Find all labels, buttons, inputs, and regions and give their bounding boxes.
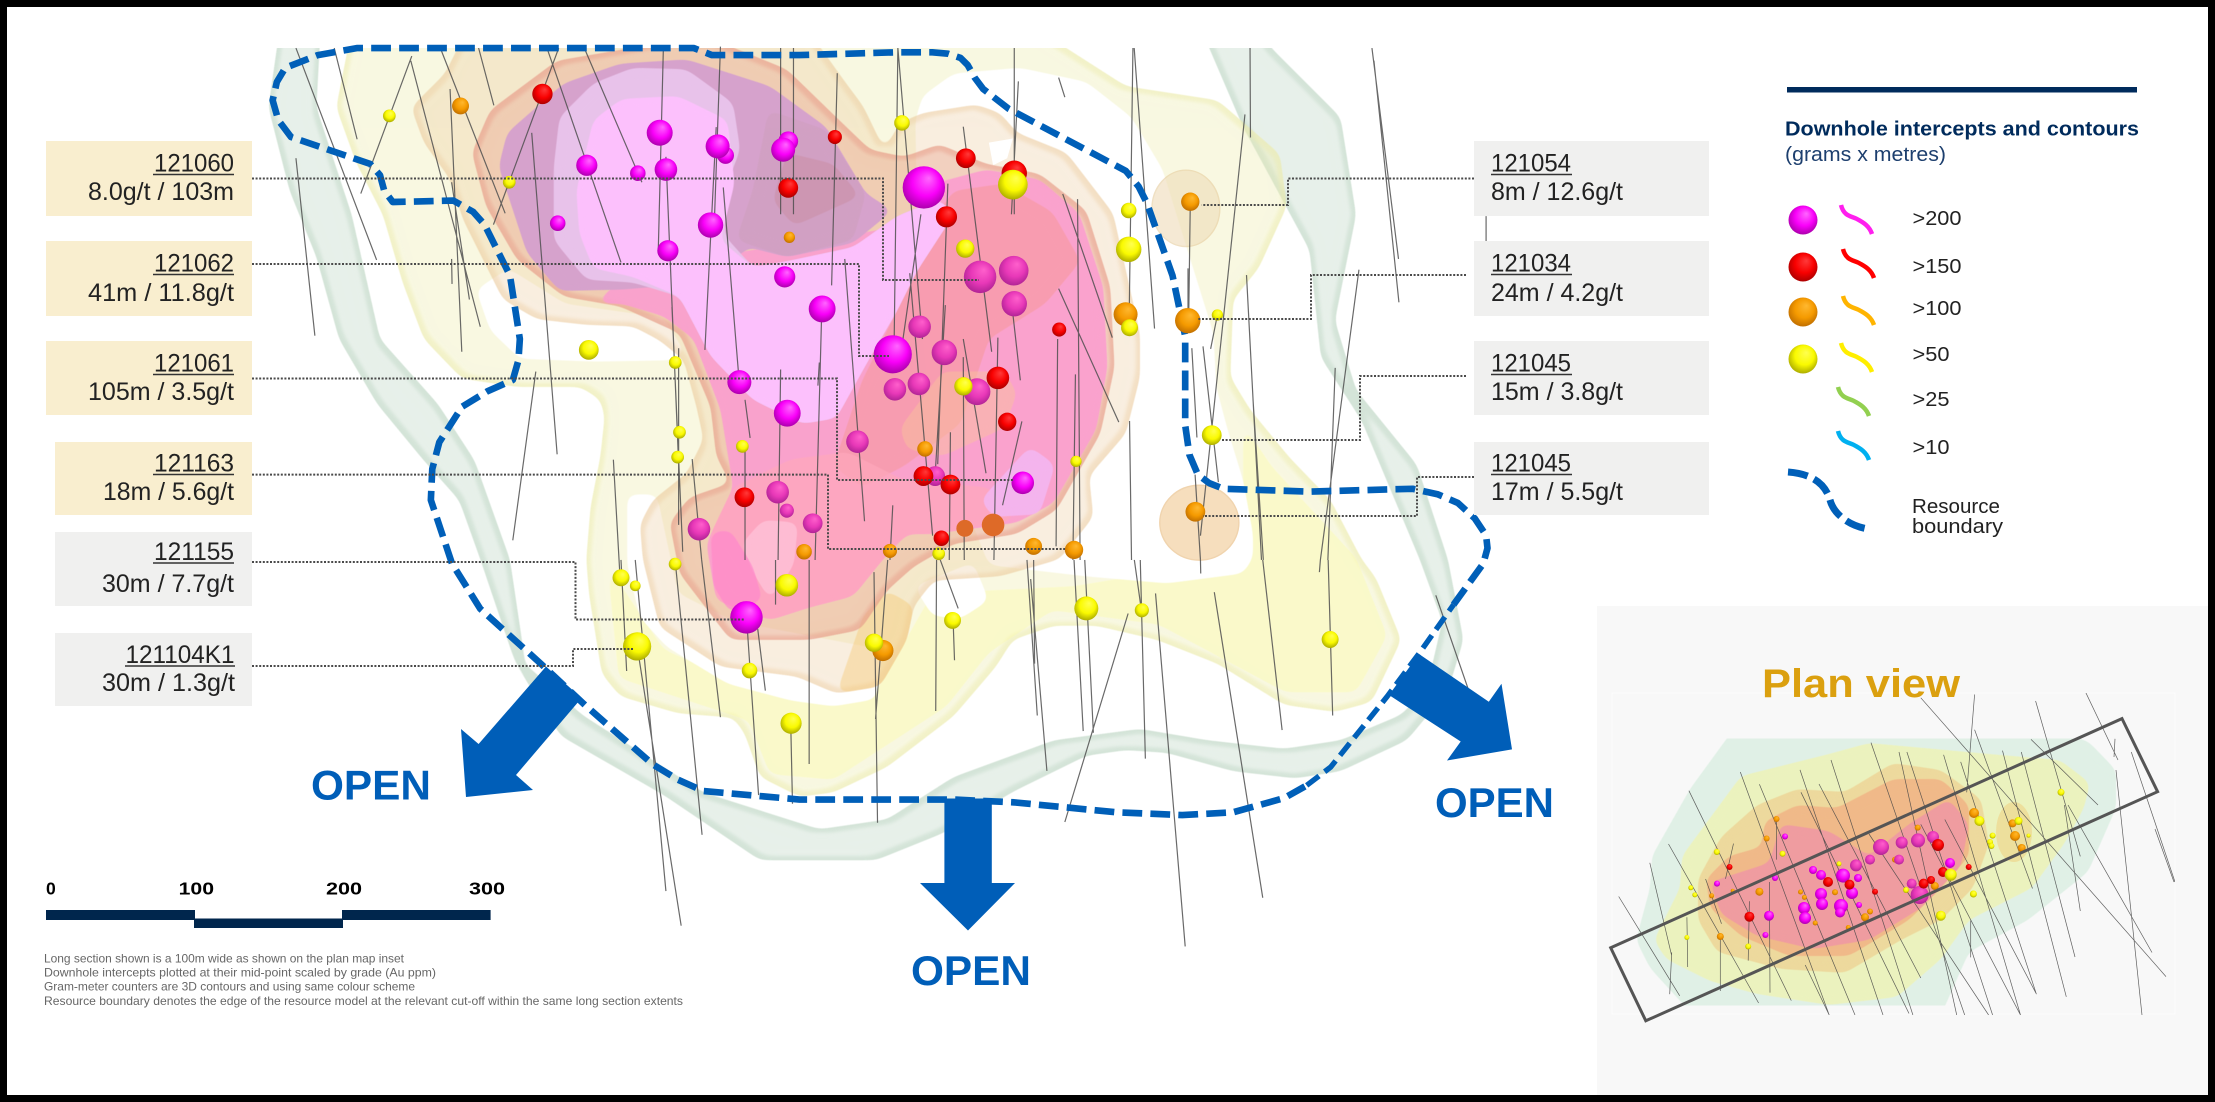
- scale bar: 0: [46, 879, 56, 899]
- contour: lavender lobe: [980, 446, 1055, 517]
- heading: OPEN middle: OPEN: [911, 947, 1031, 994]
- inset contour: green: [1636, 730, 2116, 1015]
- legend row: over 10: [1838, 431, 1950, 460]
- contour: yellow shell: [336, 28, 1401, 797]
- label: 121104K1: [55, 633, 252, 706]
- contour: rose lobe: [736, 110, 866, 257]
- panel: plan view inset: [1597, 606, 2208, 1095]
- contour: brighter lower yellow zone: [607, 424, 1387, 780]
- label: 121062: [46, 241, 252, 316]
- white slit near top of right lobe: [989, 138, 1013, 165]
- footnotes: Downhole intercepts plotted at their mid-point scaled by grade (Au ppm): [44, 966, 436, 980]
- legend row: over 150: >150: [1912, 256, 1962, 278]
- legend row: over 25: >25: [1912, 389, 1950, 411]
- contour: salmon shell: [472, 42, 1115, 640]
- inset spheres: yellow: [1684, 789, 2064, 950]
- contour: magenta lower core: [711, 530, 763, 613]
- legend row: over 100: [1788, 296, 1962, 326]
- label: 121163: [55, 442, 252, 515]
- contour: salmon right lobe: [833, 184, 1081, 487]
- label: 121060: 121060: [154, 149, 234, 177]
- inset contour: small right lobe: [1996, 802, 2032, 862]
- orange spheres: [452, 97, 1205, 661]
- contour: orange lobe: [836, 590, 914, 694]
- 3D gram-metre contours: [268, 28, 1463, 860]
- label: 121061: 121061: [154, 349, 234, 377]
- arrow: open to south: [920, 798, 1015, 930]
- resource boundary: [273, 48, 1487, 815]
- label: 121054: [1474, 141, 1709, 216]
- contour: hot pink main: [593, 170, 1108, 620]
- label: 121155: 30m / 7.7g/t: [102, 570, 234, 598]
- contour: outer green band: [268, 28, 1463, 860]
- label: 121034: 24m / 4.2g/t: [1491, 279, 1623, 307]
- contour: pale lilac core edge: [554, 68, 954, 424]
- inset contour: orange: [1706, 779, 1969, 956]
- inset contour: pink: [1710, 799, 1969, 949]
- red spheres: [532, 84, 1066, 546]
- label: 121045 first: 121045: [1491, 349, 1571, 377]
- label: 121060: 8.0g/t / 103m: [88, 178, 234, 206]
- inset spheres: orange: [1709, 808, 2026, 940]
- magenta spheres: [550, 120, 1034, 634]
- legend row: over 200: >200: [1912, 208, 1962, 230]
- footnotes: Gram-meter counters are 3D contours and using same colour scheme: [44, 980, 415, 994]
- label: 121045 first: 15m / 3.8g/t: [1491, 378, 1623, 406]
- yellow spheres: [383, 109, 1339, 734]
- legend row: over 25: [1838, 387, 1950, 416]
- scale bar: 200: [326, 879, 362, 899]
- legend row: resource boundary: Resource: [1912, 496, 2000, 518]
- legend row: over 150: [1788, 249, 1962, 282]
- label: 121061: 105m / 3.5g/t: [88, 378, 234, 406]
- drill hole traces: [296, 47, 1486, 946]
- legend row: over 200: [1788, 205, 1962, 234]
- footnotes: Resource boundary denotes the edge of the resource model at the relevant cut-off within the same long section extents: [44, 994, 683, 1008]
- label: 121034: 121034: [1491, 249, 1571, 277]
- legend row: over 50: [1788, 343, 1950, 374]
- contour: mauve upper lobe: [499, 59, 893, 291]
- white gap: lower left: [627, 494, 883, 706]
- label: 121155: 121155: [154, 538, 234, 566]
- label: 121155: [55, 532, 252, 606]
- inset title: plan view: Plan view: [1762, 662, 1961, 706]
- label: 121054: 8m / 12.6g/t: [1491, 178, 1623, 206]
- contour: peach shell: [411, 28, 1140, 694]
- inset drill traces: [1619, 692, 2175, 1015]
- legend row: over 100: >100: [1912, 298, 1962, 320]
- label: 121060: [46, 141, 252, 216]
- legend row: resource boundary: [1788, 472, 2003, 538]
- legend top rule: [1787, 87, 2137, 92]
- inset image frame: [1612, 693, 2175, 1014]
- scale bar: [46, 879, 505, 928]
- heading: OPEN right: OPEN: [1435, 779, 1554, 826]
- label: 121104K1: 121104K1: [126, 641, 234, 669]
- inset contour: yellow: [1654, 743, 2090, 1005]
- inset background: [1597, 606, 2208, 1095]
- contour: lower salmon lobe: [711, 452, 1017, 620]
- leader lines: [252, 178, 1474, 666]
- label: 121045 second: 17m / 5.5g/t: [1491, 478, 1623, 506]
- inset contour: tan: [1698, 763, 1989, 973]
- label: 121163: 121163: [154, 449, 234, 477]
- legend row: over 50: >50: [1912, 344, 1950, 366]
- label: 121045 second: 121045: [1491, 449, 1571, 477]
- contour: isolated lobe lower right: [1160, 485, 1239, 560]
- inset spheres: red: [1726, 839, 1972, 922]
- contour: peach inner lobe: [900, 372, 1017, 456]
- label: 121045 second: [1474, 442, 1709, 515]
- label: 121062: 41m / 11.8g/t: [88, 279, 234, 307]
- contour: bright magenta core: [576, 96, 954, 424]
- panel: long section map: [268, 28, 1487, 946]
- arrow: open to south-east: [1389, 654, 1512, 760]
- legend row: resource boundary: boundary: [1912, 516, 2003, 538]
- legend row: over 10: >10: [1912, 437, 1950, 459]
- label: 121045 first: [1474, 341, 1709, 415]
- white gap: upper right: [915, 68, 1253, 583]
- heading: OPEN left: OPEN: [311, 762, 431, 808]
- panel: legend: [1785, 87, 2139, 538]
- scale bar: 300: [469, 879, 505, 899]
- footnotes: Long section shown is a 100m wide as shown on the plan map inset: [44, 952, 405, 966]
- inset long section outline: [1611, 719, 2158, 1021]
- label: 121034: [1474, 241, 1709, 316]
- legend subtitle: (grams x metres): [1785, 144, 1946, 166]
- label: 121163: 18m / 5.6g/t: [103, 478, 234, 506]
- white gap: left: [476, 268, 685, 362]
- scale bar: 100: [179, 879, 214, 899]
- resource boundary: thinner south-east segment: [1307, 605, 1454, 785]
- white gap: lower centre: [918, 566, 986, 618]
- label: 121104K1: 30m / 1.3g/t: [102, 669, 235, 697]
- label: 121061: [46, 341, 252, 415]
- contour: rose inner lobe: [773, 153, 860, 226]
- large magenta sphere: [903, 166, 945, 209]
- inset spheres: magenta: [1714, 831, 1955, 938]
- inset contours: [1636, 730, 2116, 1015]
- label: 121054: 121054: [1491, 149, 1571, 177]
- legend title: Downhole intercepts and contours: [1785, 119, 2139, 141]
- footnotes: [44, 952, 683, 1008]
- contour: pale pink lower core: [742, 520, 798, 600]
- label: 121062: 121062: [154, 249, 234, 277]
- arrow: open to south-west: [461, 666, 582, 797]
- contour: isolated lobe upper right: [1152, 170, 1220, 247]
